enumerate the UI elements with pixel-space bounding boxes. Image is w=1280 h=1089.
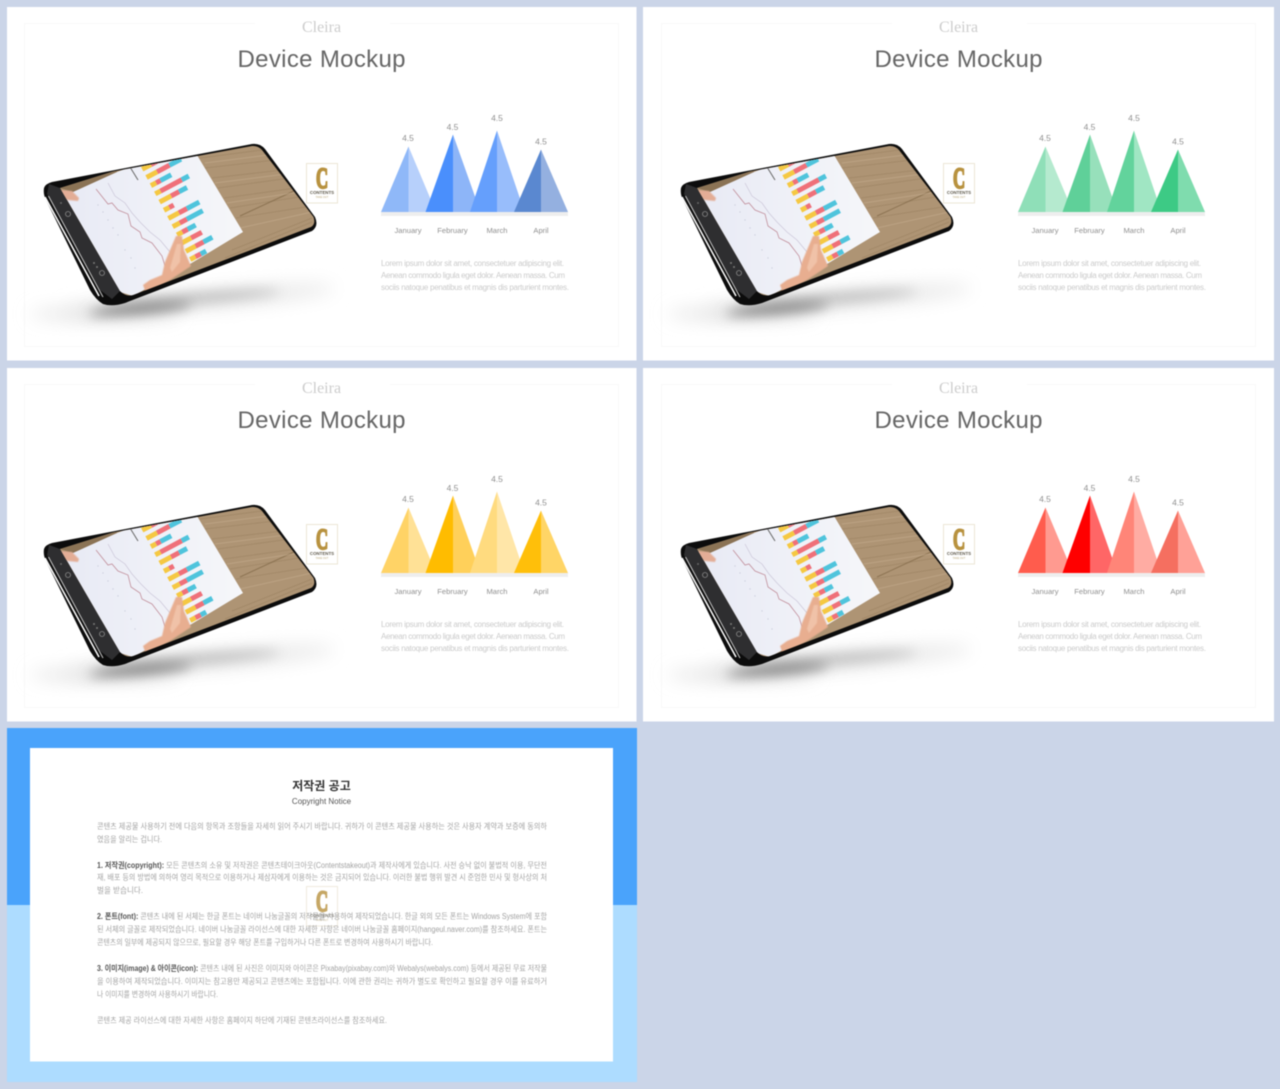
triangle chart: 4.5: [1128, 474, 1140, 484]
triangle chart: March: [486, 587, 508, 596]
body text: [1018, 259, 1206, 292]
triangle chart: 4.5: [1084, 483, 1096, 493]
triangle chart: March: [1123, 587, 1145, 596]
triangle chart: [1018, 113, 1205, 235]
body text: sociis natoque penatibus et magnis dis parturient montes.: [381, 283, 569, 292]
brand name: Cleira: [302, 19, 341, 36]
triangle chart: 4.5: [535, 498, 547, 508]
triangle chart: 4.5: [402, 494, 414, 504]
phone mockup: [667, 130, 972, 321]
brand name: Cleira: [939, 19, 978, 36]
triangle chart: February: [437, 587, 468, 596]
triangle chart: April: [1170, 587, 1186, 596]
body text: Lorem ipsum dolor sit amet, consectetuer adipiscing elit.: [381, 620, 564, 629]
panel: blue device mockup: [7, 7, 636, 360]
triangle chart: 4.5: [1039, 133, 1051, 143]
section 2: font: 2. 폰트(font): 콘텐츠 내에 된 서체는 한글 폰트는 네이버 나눔글꼴의 저작물을 사용하여 제작되었습니다. 한글 외의 모든 폰트는 Windows System에 포함: [97, 911, 548, 921]
heading: Device Mockup: [238, 46, 406, 73]
triangle chart: January: [1031, 587, 1059, 596]
brand name: Cleira: [939, 380, 978, 397]
phone mockup: [667, 491, 972, 682]
body text: sociis natoque penatibus et magnis dis parturient montes.: [381, 644, 569, 653]
logo badge: [306, 885, 338, 926]
intro paragraph: 였음을 알리는 겁니다.: [97, 834, 162, 844]
section 1: copyright: [97, 860, 547, 895]
triangle chart: January: [394, 226, 422, 235]
brand name: Cleira: [302, 380, 341, 397]
triangle chart: February: [437, 226, 468, 235]
triangle chart: [381, 113, 568, 235]
triangle chart: 4.5: [1039, 494, 1051, 504]
triangle chart: 4.5: [535, 136, 547, 146]
triangle chart: [1018, 474, 1205, 596]
triangle chart: 4.5: [491, 113, 503, 123]
section 3: image and icon: [97, 963, 547, 999]
triangle chart: 4.5: [1084, 122, 1096, 132]
intro paragraph: 콘텐츠 제공물 사용하기 전에 다음의 항목과 조항들을 자세히 읽어 주시기 바랍니다. 귀하가 이 콘텐츠 제공물 사용하는 것은 사용자 계약과 보증에 동의하: [97, 821, 548, 831]
triangle chart: February: [1074, 226, 1105, 235]
heading: Device Mockup: [238, 407, 406, 434]
body text: Lorem ipsum dolor sit amet, consectetuer adipiscing elit.: [1018, 259, 1201, 268]
triangle chart: January: [1031, 226, 1059, 235]
triangle chart: March: [1123, 226, 1145, 235]
triangle chart: [381, 474, 568, 596]
logo badge: [306, 162, 338, 203]
logo badge: [944, 523, 974, 564]
body text: Lorem ipsum dolor sit amet, consectetuer adipiscing elit.: [1018, 620, 1201, 629]
triangle chart: January: [394, 587, 422, 596]
section 3: image and icon: 을 이용하여 제작되었습니다. 이미지는 참고용만 제공되고 콘텐츠에는 포함됩니다. 이에 관한 권리는 귀하가 별도로 확인하고 필요할 경우 이를 유료하거: [97, 976, 547, 986]
section 2: font: 콘텐츠의 일부에 제공되지 않으므로, 필요할 경우 해당 폰트를 구입하거나 다른 폰트로 변경하여 사용하시기 바랍니다.: [97, 937, 433, 947]
panel: green device mockup: [643, 7, 1274, 360]
triangle chart: April: [1170, 226, 1186, 235]
logo badge: [306, 523, 338, 564]
closing line: 콘텐츠 제공 라이선스에 대한 자세한 사항은 홈페이지 하단에 기재된 콘텐츠라이선스를 참조하세요.: [97, 1015, 387, 1025]
body text: Aenean commodo ligula eget dolor. Aenean massa. Cum: [381, 632, 565, 641]
logo badge: [944, 162, 974, 203]
triangle chart: 4.5: [447, 483, 459, 493]
phone mockup: [30, 130, 335, 321]
section 3: image and icon: 나 이미지를 변경하여 사용하시기 바랍니다.: [97, 989, 218, 999]
body text: sociis natoque penatibus et magnis dis parturient montes.: [1018, 283, 1206, 292]
section 1: copyright: 1. 저작권(copyright): 모든 콘텐츠의 소유 및 저작권은 콘텐츠테이크아웃(Contentstakeout)과 제작사에게 있습니다. 사전 승낙 없이 불법적 이용, 무단전: [97, 860, 547, 870]
phone mockup: [30, 491, 335, 682]
intro paragraph: [97, 821, 548, 844]
body text: Lorem ipsum dolor sit amet, consectetuer adipiscing elit.: [381, 259, 564, 268]
body text: [381, 620, 569, 653]
triangle chart: March: [486, 226, 508, 235]
triangle chart: 4.5: [1128, 113, 1140, 123]
triangle chart: 4.5: [491, 474, 503, 484]
triangle chart: 4.5: [402, 133, 414, 143]
heading: Device Mockup: [874, 407, 1042, 434]
body text: Aenean commodo ligula eget dolor. Aenean massa. Cum: [381, 271, 565, 280]
section 2: font: 된 서체의 글꼴로 제작되었습니다. 네이버 나눔글꼴 라이선스에 대한 자세한 사항은 네이버 나눔글꼴 홈페이지(hangeul.naver.com)를 참조하세요. 폰트는: [97, 924, 547, 934]
triangle chart: 4.5: [1172, 136, 1184, 146]
section 3: image and icon: 3. 이미지(image) & 아이콘(icon): 콘텐츠 내에 된 사진은 이미지와 아이콘은 Pixabay(pixabay.com)와 Webalys(webalys.com) 등에서 제공된 무료 저작물: [97, 963, 547, 973]
panel: copyright notice: [7, 728, 637, 1082]
body text: Aenean commodo ligula eget dolor. Aenean massa. Cum: [1018, 271, 1202, 280]
notice subtitle: Copyright Notice: [292, 797, 352, 806]
triangle chart: 4.5: [447, 122, 459, 132]
section 1: copyright: 재, 배포 등의 방법에 의하여 영리 목적으로 이용하거나 제삼자에게 이용하는 것은 금지되어 있습니다. 이러한 불법 행위 발견 시 준엄한 민사 및 형사상의 처: [97, 872, 547, 882]
triangle chart: April: [533, 226, 549, 235]
heading: Device Mockup: [874, 46, 1042, 73]
panel: yellow device mockup: [7, 368, 636, 722]
panel: red device mockup: [643, 368, 1274, 722]
notice title: 저작권 공고: [292, 778, 351, 793]
body text: sociis natoque penatibus et magnis dis parturient montes.: [1018, 644, 1206, 653]
triangle chart: February: [1074, 587, 1105, 596]
section 1: copyright: 벌을 받습니다.: [97, 885, 143, 895]
section 2: font: [97, 911, 548, 947]
body text: [381, 259, 569, 292]
body text: [1018, 620, 1206, 653]
triangle chart: April: [533, 587, 549, 596]
triangle chart: 4.5: [1172, 498, 1184, 508]
body text: Aenean commodo ligula eget dolor. Aenean massa. Cum: [1018, 632, 1202, 641]
